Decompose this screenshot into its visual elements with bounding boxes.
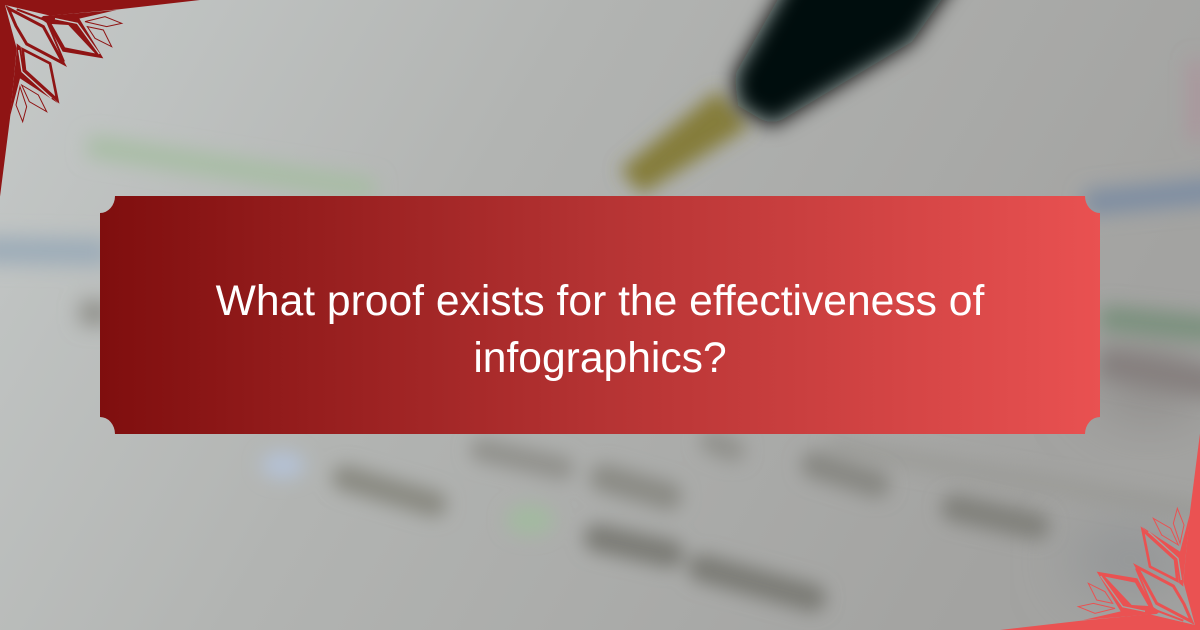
chart lines, blurred	[0, 60, 1200, 515]
legend dots and labels, blurred	[261, 442, 1036, 598]
title text: What proof exists for the effectiveness of infographics?	[216, 277, 984, 382]
pen	[620, 0, 970, 194]
